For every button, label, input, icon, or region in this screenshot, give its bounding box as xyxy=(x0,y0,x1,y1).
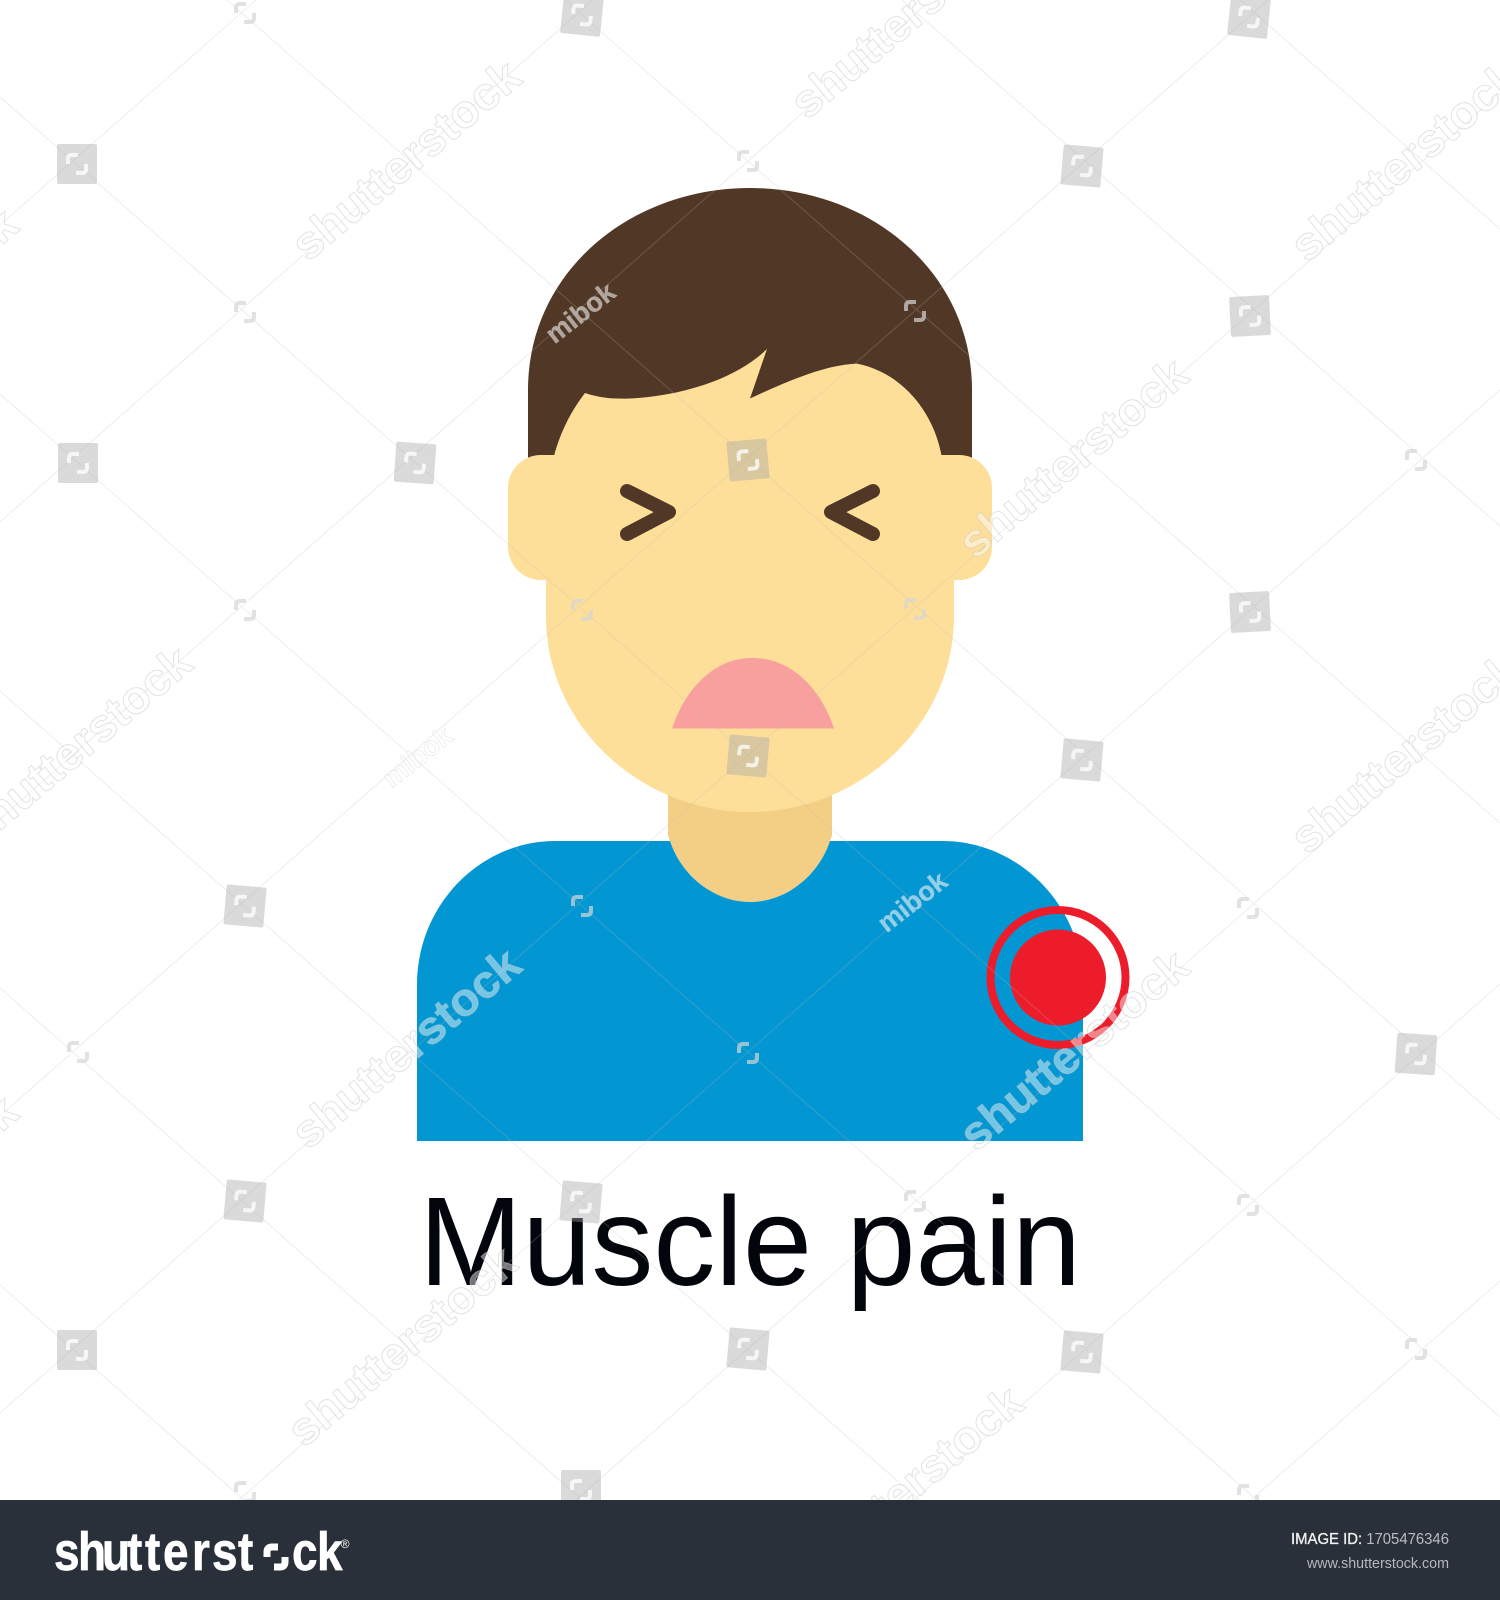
watermark: shutterstock text: shutterstock xyxy=(277,1235,527,1456)
footer logo: shutterstock xyxy=(54,1522,343,1582)
neck xyxy=(668,780,832,902)
face xyxy=(546,349,954,812)
watermark: shutterstock text: shutterstock xyxy=(281,49,531,270)
footer registered mark: ® xyxy=(341,1537,350,1551)
image id: IMAGE ID: 1705476346 xyxy=(1291,1531,1449,1548)
mouth xyxy=(672,658,834,728)
watermark: contributor name: mibok xyxy=(377,720,459,793)
watermark: shutterstock text: shutterstock xyxy=(783,1375,1033,1596)
illustration: man with muscle pain xyxy=(417,188,1126,1141)
watermark: contributor name: mibok xyxy=(540,276,622,349)
pain marker on shoulder xyxy=(990,910,1126,1045)
caption: Muscle pain xyxy=(419,1171,1081,1312)
watermark: contributor name xyxy=(377,276,954,938)
eyes: squeezed shut xyxy=(627,491,873,534)
watermark: shutterstock text: shutterstock xyxy=(281,937,531,1158)
website: www.shutterstock.com xyxy=(1306,1555,1449,1572)
hair xyxy=(528,188,972,458)
watermark: shutterstock text: shutterstock xyxy=(948,347,1198,568)
watermark: shutterstock text: shutterstock xyxy=(949,939,1199,1160)
footer bar xyxy=(0,1500,1500,1600)
ears xyxy=(508,455,992,580)
watermark: contributor name: mibok xyxy=(872,865,954,938)
shirt xyxy=(417,841,1083,1141)
